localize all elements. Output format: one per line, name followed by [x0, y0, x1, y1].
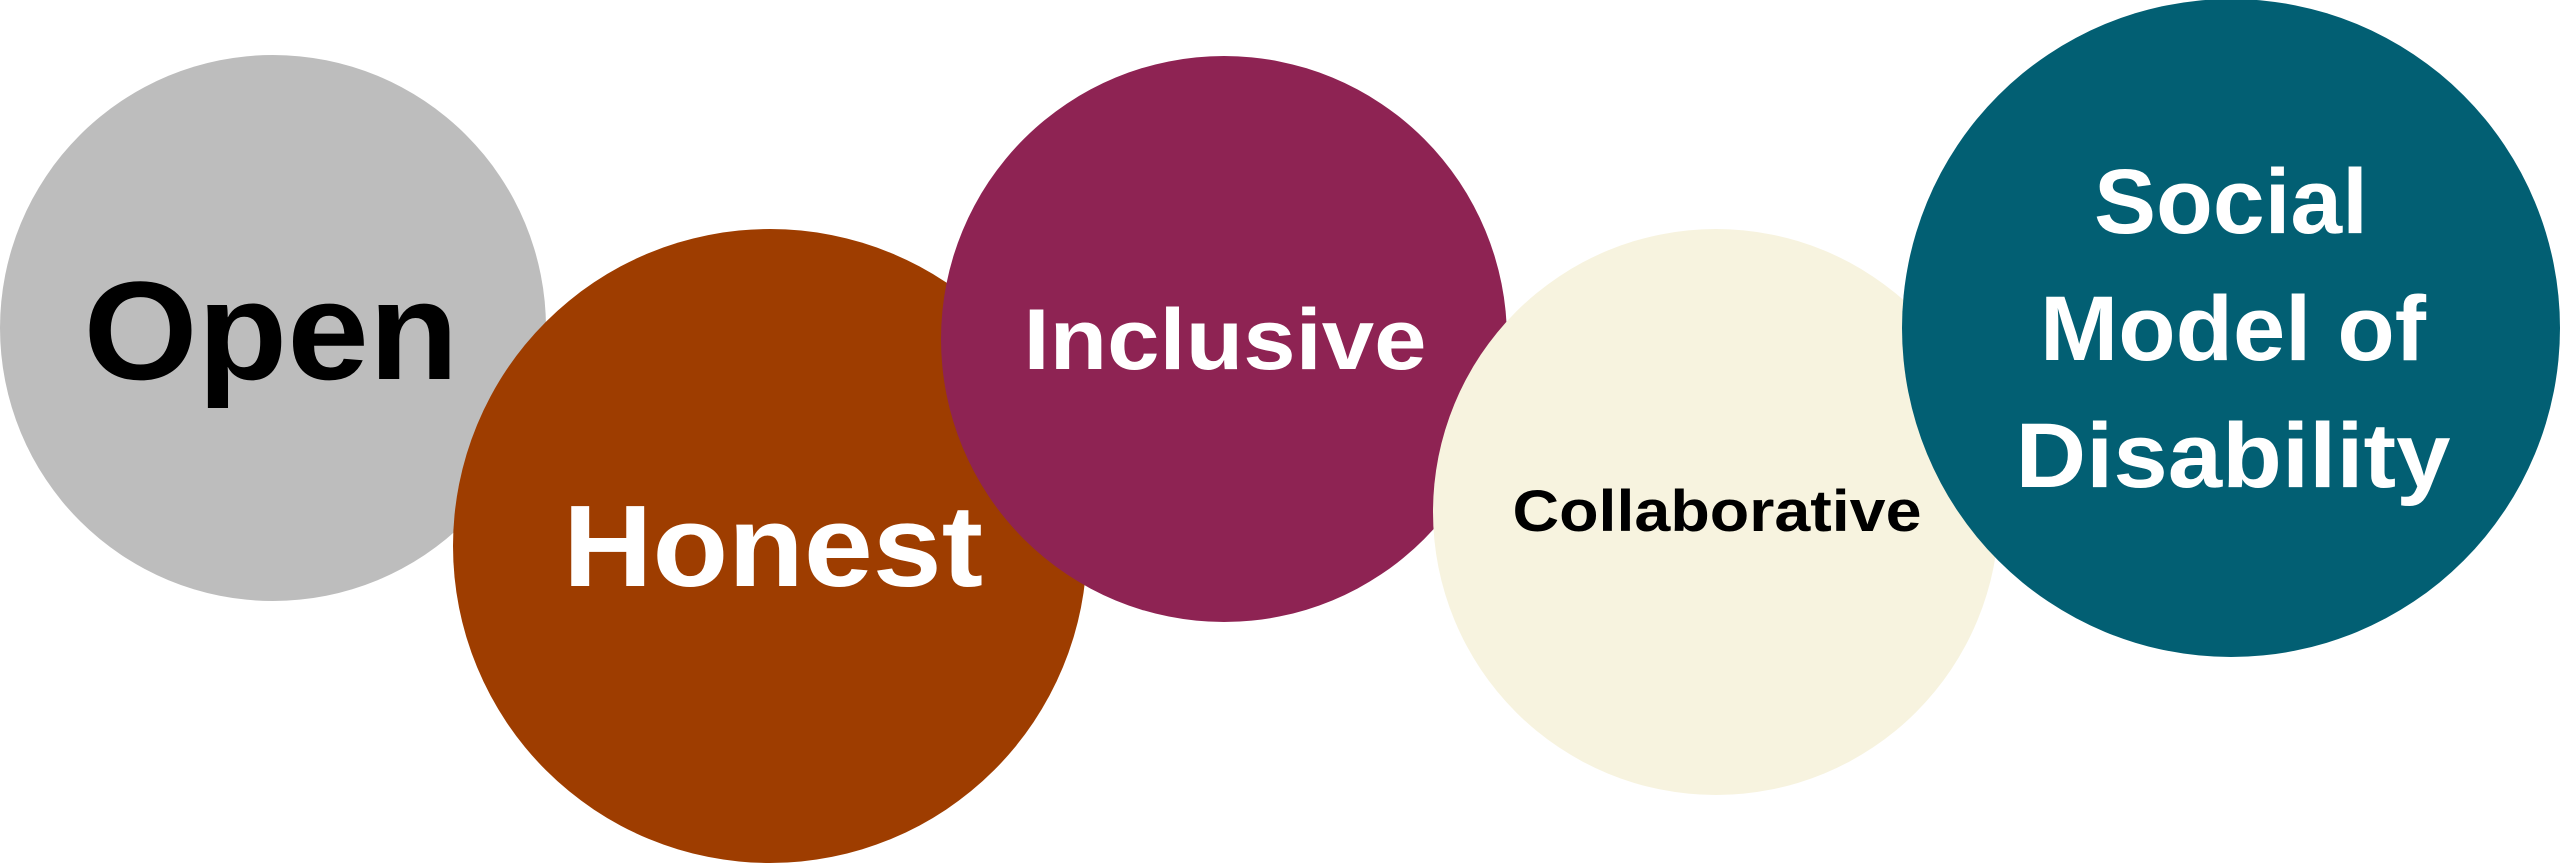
label: Honest: Honest [563, 481, 983, 611]
label: Inclusive: Inclusive [1024, 292, 1426, 388]
circle: Social Model of Disability [1902, 0, 2560, 657]
label: Social Model of Disability [2016, 151, 2450, 507]
circle: Collaborative [1433, 229, 1999, 795]
label: Social Model of Disability: Disability [2016, 405, 2450, 507]
label: Social Model of Disability: Model of [2040, 278, 2426, 380]
circle: Open [0, 55, 546, 601]
label: Social Model of Disability: Social [2094, 151, 2368, 253]
circle: Honest [453, 229, 1087, 863]
circle: Inclusive [941, 56, 1507, 622]
label: Open: Open [84, 252, 458, 409]
label: Collaborative: Collaborative [1512, 479, 1922, 544]
